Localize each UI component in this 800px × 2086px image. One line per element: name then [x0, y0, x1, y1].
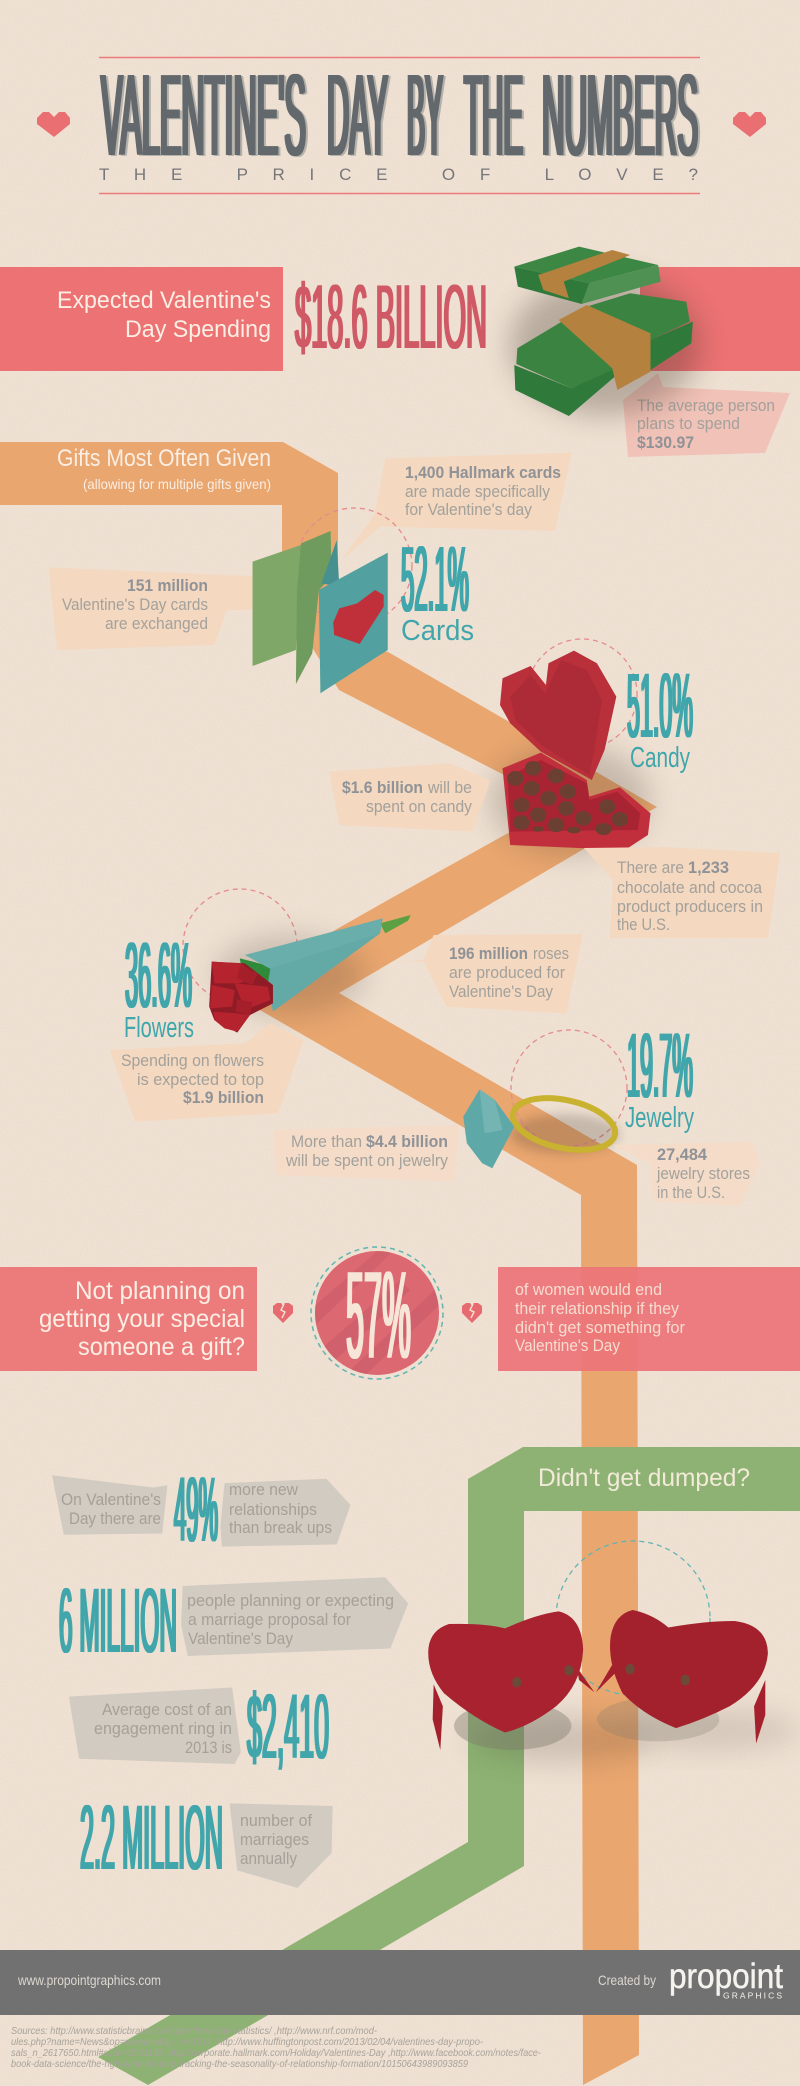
callout: 151 million: 151 million: [127, 577, 208, 595]
icon: two kissing hearts: [428, 1610, 800, 1762]
callout: marriage proposal: [181, 1577, 408, 1656]
panel: expected spending band: Day Spending: [125, 316, 271, 343]
callout: engagement ring cost: engagement ring in: [94, 1719, 232, 1738]
panel: not planning on a gift: Not planning on: [75, 1277, 245, 1305]
icon: right broken heart: [462, 1303, 482, 1323]
text: 57%: [346, 1247, 411, 1385]
callout: jewelry stores: in the U.S.: [657, 1184, 725, 1202]
dashed ring: cards: [296, 508, 412, 624]
stat: jewelry: [625, 1015, 694, 1134]
band text: Expected Valentine's: [57, 287, 271, 314]
panel: not planning on a gift: someone a gift?: [78, 1333, 245, 1361]
panel: women would end relationship: of women would end: [515, 1280, 662, 1299]
sources: book-data-science/the-right-time-for-love-tracking-the-seasonality-of-relationship-formation/10150643989093859: [11, 2058, 468, 2070]
gifts heading: (allowing for multiple gifts given): [83, 476, 271, 492]
heading: didn't get dumped: Didn't get dumped?: [538, 1464, 750, 1492]
callout: chocolate producers: [584, 847, 780, 938]
heading: DAY: [327, 50, 388, 180]
callout: more new relationships: more new: [229, 1480, 299, 1499]
text: 6 MILLION: [59, 1570, 177, 1672]
callout: roses: [395, 934, 583, 1013]
callout: candy spending: [329, 763, 490, 832]
panel: women would end relationship: [498, 1267, 800, 1371]
logo: propoint: [669, 1957, 783, 1996]
callout: marriage proposal: Valentine's Day: [188, 1629, 293, 1648]
callout: jewelry stores: 27,484: [657, 1146, 708, 1164]
callout: flower spending: is expected to top: [137, 1071, 264, 1089]
icon: right heart: [733, 112, 766, 137]
heading: THE: [464, 50, 523, 180]
callout: roses: 196 million: [449, 945, 528, 963]
sources: sals_n_2617650.html#slide=2061130 ,http://corporate.hallmark.com/Holiday/Valentines-Day ,http://www.facebook.com/notes/face-: [11, 2047, 541, 2059]
callout: jewelry stores: [612, 1142, 760, 1206]
heading: BY: [407, 50, 443, 180]
callout: marriages annually: [230, 1803, 333, 1888]
icon: money stacks: [510, 247, 700, 416]
orange ribbon: [0, 442, 657, 2085]
callout: jewelry spending: More than: [291, 1133, 362, 1151]
icon: diamond ring: [463, 1089, 620, 1168]
text: 2.2 MILLION: [80, 1787, 223, 1889]
callout: on Valentine's day: Day there are: [69, 1509, 161, 1528]
callout: flower spending: Spending on flowers: [121, 1052, 264, 1070]
panel: women would end relationship: didn't get something for: [515, 1318, 685, 1337]
gifts heading: [57, 445, 271, 492]
callout: more new relationships: [220, 1479, 351, 1547]
callout: hallmark cards: for Valentine's day: [405, 501, 533, 519]
callout: average person: $130.97: [637, 434, 694, 452]
stat: flowers: [124, 923, 194, 1044]
callout: chocolate producers: chocolate and cocoa: [617, 879, 763, 897]
credit: Created by: [598, 1972, 656, 1988]
stat: jewelry: Jewelry: [625, 1102, 694, 1134]
callout: on Valentine's day: [52, 1475, 167, 1535]
callout: marriages annually: annually: [240, 1849, 297, 1868]
callout: jewelry spending: [273, 1125, 459, 1182]
stat: candy: [627, 655, 693, 774]
callout: chocolate producers: product producers in: [617, 898, 763, 916]
callout: roses: Valentine's Day: [449, 983, 554, 1001]
callout: hallmark cards: are made specifically: [405, 483, 551, 501]
text: 52.1%: [401, 527, 469, 631]
footer url: www.propointgraphics.com: [17, 1972, 161, 1988]
stat: cards: Cards: [401, 615, 474, 647]
callout: candy spending: spent on candy: [366, 798, 473, 816]
text: $2,410: [247, 1676, 329, 1778]
callout: chocolate producers: There are: [617, 859, 684, 877]
callout: average person: The average person: [637, 397, 775, 415]
callout: jewelry spending: $4.4 billion: [366, 1133, 448, 1151]
callout: more new relationships: than break ups: [229, 1518, 332, 1537]
dashed ring: flowers: [183, 889, 297, 1003]
callout: 151 million: [48, 567, 253, 650]
panel: women would end relationship: Valentine's Day: [515, 1336, 620, 1355]
sources: Sources: http://www.statisticbrain.com/valentines-day-statistics/ ,http://www.nrf.com/mod-: [11, 2025, 377, 2037]
callout: marriages annually: marriages: [240, 1830, 309, 1849]
callout: marriage proposal: people planning or expecting: [187, 1591, 394, 1610]
callout: average person: plans to spend: [637, 415, 740, 433]
icon: left heart: [37, 112, 70, 137]
panel: women would end relationship: their relationship if they: [515, 1299, 679, 1318]
callout: engagement ring cost: 2013 is: [185, 1738, 232, 1757]
callout: roses: roses: [533, 945, 569, 963]
sources: [11, 2025, 541, 2070]
footer bar: [0, 1950, 800, 2015]
green ribbon: [98, 1447, 800, 2085]
panel: expected spending band: [0, 267, 800, 371]
stat: cards: [401, 527, 474, 647]
callout: more new relationships: relationships: [229, 1500, 317, 1519]
subtitle: T H E P R I C E O F L O V E ?: [99, 165, 698, 184]
callout: hallmark cards: 1,400 Hallmark cards: [405, 464, 561, 482]
text: 36.6%: [125, 923, 192, 1027]
title block: [99, 50, 700, 194]
icon: greeting card: [253, 531, 388, 693]
callout: candy spending: will be: [427, 779, 472, 797]
callout: marriage proposal: a marriage proposal for: [188, 1610, 351, 1629]
callout: hallmark cards: [342, 453, 571, 560]
sources: ules.php?name=News&op=viewlive&sp_id=1517 ,http://www.huffingtonpost.com/2013/02/04/valentines-day-propo-: [11, 2036, 483, 2048]
icon: candy box: [490, 651, 651, 855]
dashed ring: candy: [527, 639, 637, 749]
logo: GRAPHICS: [723, 1990, 782, 2000]
callout: on Valentine's day: On Valentine's: [61, 1490, 161, 1509]
callout: chocolate producers: the U.S.: [617, 916, 670, 934]
icon: left broken heart: [273, 1303, 293, 1323]
panel: not planning on a gift: [0, 1267, 257, 1371]
gifts heading: Gifts Most Often Given: [57, 445, 271, 472]
callout: jewelry spending: will be spent on jewelry: [285, 1152, 449, 1170]
callout: 151 million: are exchanged: [105, 615, 208, 633]
callout: flower spending: $1.9 billion: [183, 1089, 264, 1107]
dashed ring: jewelry: [511, 1030, 627, 1146]
callout: flower spending: [110, 1023, 304, 1122]
stat: candy: Candy: [630, 742, 690, 774]
dashed ring: hearts: [556, 1541, 710, 1695]
callout: engagement ring cost: [69, 1687, 241, 1764]
callout: marriages annually: number of: [240, 1811, 312, 1830]
callout: average person: [623, 373, 790, 457]
text: 49%: [174, 1459, 218, 1561]
callout: candy spending: $1.6 billion: [342, 779, 423, 797]
stat: flowers: Flowers: [124, 1012, 194, 1044]
callout: engagement ring cost: Average cost of an: [102, 1700, 232, 1719]
panel: not planning on a gift: getting your special: [39, 1305, 245, 1333]
callout: 151 million: Valentine's Day cards: [62, 596, 208, 614]
stat badge: 57%: [310, 1240, 445, 1385]
icon: bouquet: [209, 915, 411, 1033]
callout: roses: are produced for: [449, 964, 565, 982]
callout: chocolate producers: 1,233: [688, 859, 729, 877]
callout: jewelry stores: jewelry stores: [656, 1165, 750, 1183]
